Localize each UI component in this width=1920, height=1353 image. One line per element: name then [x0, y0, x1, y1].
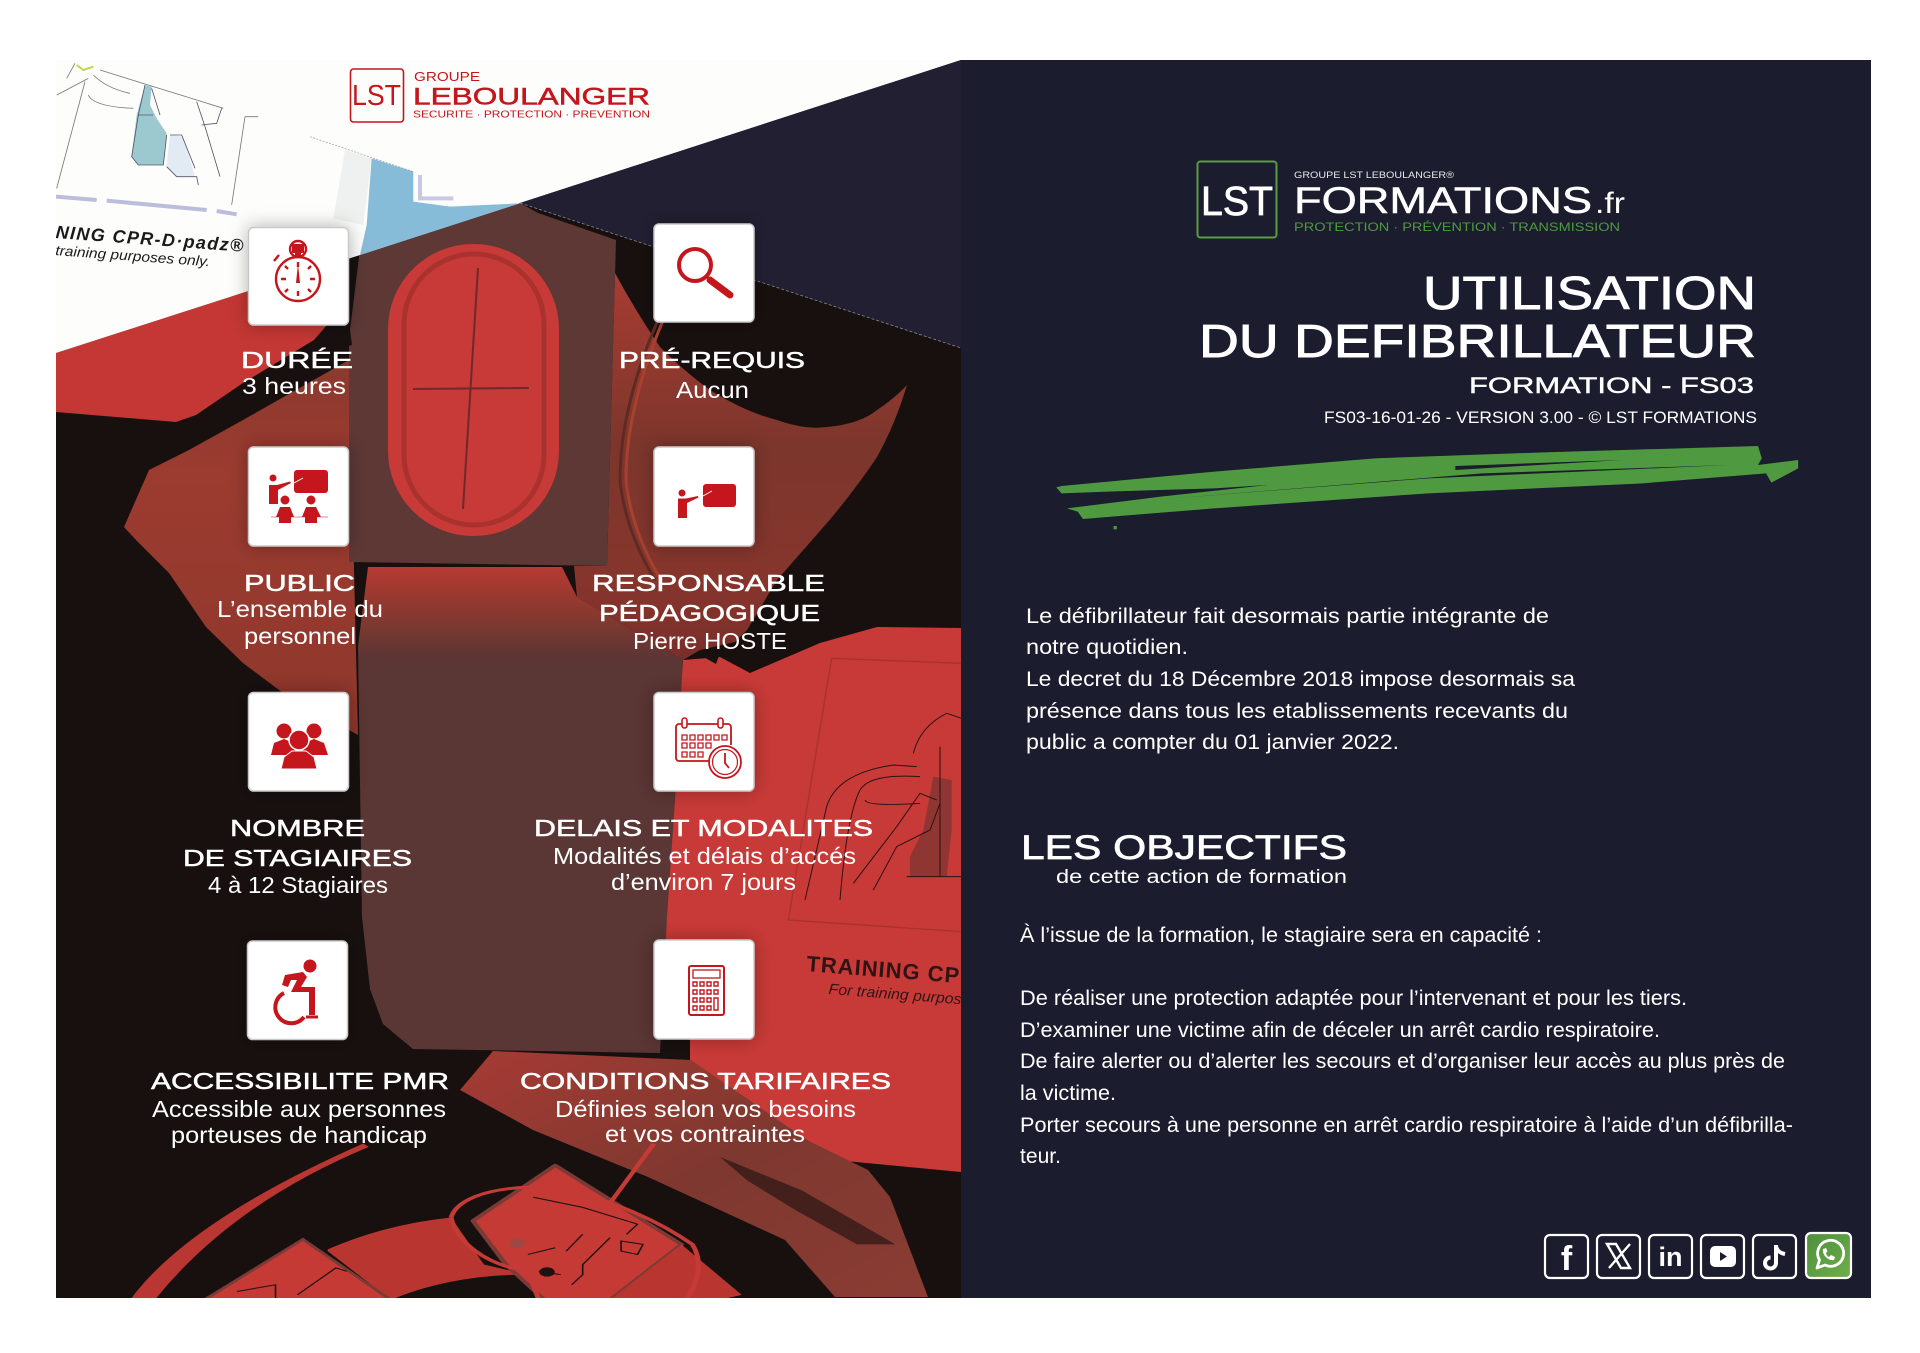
- icon: stopwatch: [274, 241, 320, 301]
- photo text: training card: For training purposes: [828, 981, 979, 1010]
- heading: les objectifs: de cette action de formation: [1056, 867, 1347, 888]
- text block: objectives: D’examiner une victime afin de déceler un arrêt cardio respiratoire.: [1020, 1019, 1660, 1042]
- icon: wheelchair: [275, 960, 318, 1023]
- text block: introduction: [1026, 605, 1575, 754]
- title: [1199, 267, 1756, 367]
- card: accessibilité PMR: Accessible aux personnes: [152, 1096, 446, 1122]
- green brush stroke: [1056, 446, 1798, 529]
- card: pré-requis: PRÉ-REQUIS: [619, 347, 805, 373]
- text block: introduction: Le défibrillateur fait desormais partie intégrante de: [1026, 605, 1549, 628]
- logo: LST Formations: LST: [1201, 178, 1273, 224]
- text block: objectives: [1020, 924, 1793, 1168]
- card: accessibilité PMR: ACCESSIBILITE PMR: [151, 1068, 449, 1094]
- card: public: L’ensemble du: [217, 596, 383, 622]
- text block: introduction: présence dans tous les etablissements recevants du: [1026, 700, 1568, 723]
- heading: les objectifs: [1021, 829, 1347, 888]
- card: délais et modalités: DELAIS ET MODALITES: [534, 815, 873, 841]
- card: responsable pédagogique: RESPONSABLE: [592, 570, 825, 596]
- photo text: pad label: training purposes only.: [55, 242, 211, 269]
- card: accessibilité PMR: porteuses de handicap: [171, 1122, 427, 1148]
- card: durée: 3 heures: [242, 373, 346, 399]
- card: conditions tarifaires: et vos contraintes: [605, 1121, 805, 1147]
- card: conditions tarifaires: [520, 940, 891, 1147]
- icon: linkedin: in: [1658, 1242, 1682, 1272]
- logo: LST Formations: GROUPE LST LEBOULANGER®: [1294, 170, 1454, 180]
- icon: X: [1597, 1235, 1640, 1278]
- logo: groupe LST Leboulanger: LST: [352, 80, 401, 112]
- card: responsable pédagogique: PÉDAGOGIQUE: [599, 600, 820, 626]
- card: pré-requis: [619, 224, 805, 403]
- version line: FS03-16-01-26 - VERSION 3.00 - © LST FORMATIONS: [1324, 408, 1757, 427]
- card: nombre de stagiaires: DE STAGIAIRES: [183, 845, 412, 871]
- card: nombre de stagiaires: 4 à 12 Stagiaires: [208, 872, 388, 898]
- icon: tiktok: [1753, 1235, 1796, 1278]
- photo text: training card: TRAINING CPR: [806, 951, 977, 989]
- panel: navy right side: [961, 60, 1871, 1298]
- heading: les objectifs: LES OBJECTIFS: [1021, 829, 1347, 867]
- card: responsable pédagogique: [592, 447, 825, 654]
- logo: LST Formations: .fr: [1595, 187, 1625, 220]
- icon: calendar and clock: [676, 718, 741, 778]
- icon: facebook: [1545, 1235, 1588, 1278]
- title: UTILISATION: [1423, 267, 1756, 319]
- logo: groupe LST Leboulanger: [350, 69, 650, 122]
- icon: magnifier: [679, 249, 730, 295]
- card: délais et modalités: d’environ 7 jours: [611, 869, 796, 895]
- logo: groupe LST Leboulanger: SECURITE · PROTECTION · PREVENTION: [413, 108, 650, 120]
- icon: youtube: [1701, 1235, 1744, 1278]
- text block: objectives: teur.: [1020, 1145, 1061, 1168]
- icon: presenter: [678, 484, 736, 518]
- photo text: training card: [807, 956, 961, 1006]
- card: public: personnel: [244, 623, 356, 649]
- icon: presenter with audience: [269, 470, 328, 523]
- text block: introduction: notre quotidien.: [1026, 636, 1188, 659]
- icon: group of people: [271, 724, 328, 769]
- icon: facebook: f: [1561, 1240, 1573, 1278]
- logo: groupe LST Leboulanger: GROUPE: [414, 69, 480, 84]
- text block: objectives: À l’issue de la formation, le stagiaire sera en capacité :: [1020, 924, 1542, 947]
- card: nombre de stagiaires: [183, 692, 412, 898]
- text block: objectives: De faire alerter ou d’alerter les secours et d’organiser leur accès au plus près de: [1020, 1050, 1785, 1073]
- logo: LST Formations: [1198, 162, 1625, 238]
- text block: objectives: la victime.: [1020, 1082, 1116, 1105]
- logo: LST Formations: FORMATIONS: [1294, 180, 1592, 221]
- subtitle: formation code: FORMATION - FS03: [1469, 373, 1754, 398]
- card: accessibilité PMR: [151, 941, 449, 1148]
- text block: introduction: public a compter du 01 janvier 2022.: [1026, 731, 1399, 754]
- title: DU DEFIBRILLATEUR: [1199, 315, 1756, 367]
- card: public: [217, 447, 383, 649]
- panel: training photo background: [54, 60, 982, 1300]
- card: durée: [241, 228, 353, 399]
- logo: LST Formations: PROTECTION · PRÉVENTION · TRANSMISSION: [1294, 219, 1620, 234]
- card: nombre de stagiaires: NOMBRE: [230, 815, 365, 841]
- card: délais et modalités: [534, 692, 873, 895]
- card: conditions tarifaires: Définies selon vos besoins: [555, 1096, 856, 1122]
- card: pré-requis: Aucun: [676, 377, 749, 403]
- logo: groupe LST Leboulanger: LEBOULANGER: [413, 84, 650, 110]
- card: responsable pédagogique: Pierre HOSTE: [633, 628, 787, 654]
- text block: introduction: Le decret du 18 Décembre 2018 impose desormais sa: [1026, 668, 1575, 691]
- photo text: pad label: NING CPR-D·padz®: [55, 222, 245, 256]
- text block: objectives: De réaliser une protection adaptée pour l’intervenant et pour les tiers.: [1020, 987, 1687, 1010]
- text block: objectives: Porter secours à une personne en arrêt cardio respiratoire à l’aide d’un défibrilla-: [1020, 1114, 1793, 1137]
- card: public: PUBLIC: [244, 570, 355, 596]
- card: conditions tarifaires: CONDITIONS TARIFAIRES: [520, 1068, 891, 1094]
- card: durée: DURÉE: [241, 347, 353, 373]
- card: délais et modalités: Modalités et délais d’accés: [553, 843, 856, 869]
- icon: calculator: [689, 966, 724, 1015]
- icon: whatsapp: [1806, 1233, 1851, 1278]
- icon: linkedin: [1649, 1235, 1692, 1278]
- photo text: pad label: [56, 226, 244, 268]
- social icons: [1545, 1233, 1851, 1278]
